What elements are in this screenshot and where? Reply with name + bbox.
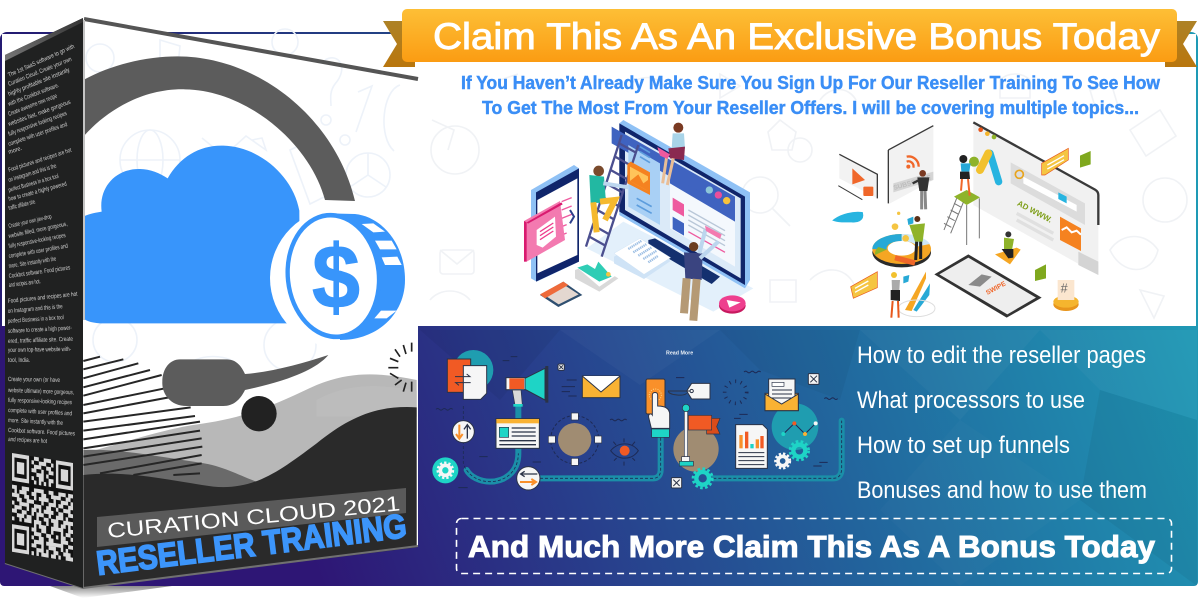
top rim of box (84, 19, 418, 79)
ring chart with man and coins (872, 212, 931, 267)
call to action box (456, 518, 1172, 574)
intro text: To Get The Most From Your Reseller Offers. I will be covering multiple topics... (482, 98, 1139, 118)
eye icon (611, 438, 638, 466)
side text (7, 43, 78, 445)
side text: fully responsive looking recipes (7, 110, 68, 138)
document swap icon (447, 359, 487, 399)
side text: The 1st SaaS software to go with (7, 43, 76, 79)
target node diagram (548, 413, 602, 465)
price tag (668, 383, 710, 399)
dashed pipe centres (463, 406, 842, 482)
low-poly texture of the lower panel (420, 330, 1197, 586)
man at subscribe card (913, 170, 929, 209)
ladder platform with person (944, 155, 980, 245)
side text: your own top-have website with- (8, 346, 71, 354)
side face top bevel (5, 18, 83, 61)
person climbing the ladder (589, 166, 628, 232)
product name line two: RESELLER TRAINING (94, 507, 409, 583)
side text: website ultimate) more gorgeous, (7, 387, 74, 396)
call to action box: And Much More Claim This As A Bonus Today (468, 529, 1156, 564)
box bottom edge (5, 546, 418, 588)
wave layers (83, 343, 417, 588)
side text: Cookbot software. Food pictures (8, 264, 71, 280)
teal accent circles (453, 350, 818, 450)
headset band (83, 56, 355, 201)
calendar (540, 282, 582, 307)
woman with tablet (891, 272, 935, 318)
teal pipes (467, 405, 842, 482)
product name band (97, 488, 406, 547)
topics list: Bonuses and how to use them (857, 477, 1147, 504)
smartphone swipe (934, 254, 1042, 318)
product box (5, 18, 418, 598)
side text: Curation Cloud. Create your own (7, 56, 73, 88)
side text: and recipes are hot. (8, 278, 41, 289)
side text: Food pictures and recipes are hot (7, 291, 78, 305)
phone tap icon (646, 379, 670, 437)
paper stacks (575, 238, 671, 292)
intro text (461, 73, 1161, 118)
box front face (83, 19, 418, 588)
gear badge (432, 457, 458, 483)
floor shadow (587, 222, 753, 312)
side text: and recipes are hot (8, 436, 47, 445)
faint doodle pattern on the white panel (430, 74, 1187, 318)
side text: Create your own jaw-drop (8, 213, 53, 230)
side text: software to create a high power- (8, 325, 72, 335)
box side face (5, 18, 83, 588)
small x boxes (558, 364, 819, 488)
side text: highly profitable site instantly (7, 66, 72, 98)
side text: complete with user profiles and (8, 407, 73, 417)
title: Claim This As An Exclusive Bonus Today (433, 16, 1161, 57)
topics list: What processors to use (857, 387, 1085, 414)
side text: more. (7, 145, 23, 156)
side text: ered, traffic affiliate site. Create (8, 336, 73, 345)
headset microphone (162, 355, 328, 406)
subscribe window (888, 126, 933, 204)
side text: perfect Business in a box tool (8, 173, 60, 194)
envelope icon (562, 376, 620, 398)
QR code (12, 453, 73, 562)
hashtag podium: # (1061, 281, 1068, 295)
smartphone swipe: SWIPE (985, 280, 1008, 297)
product name line one: CURATION CLOUD 2021 (106, 492, 401, 543)
side text: with the Cookbot software. (7, 82, 60, 108)
coin with dollar sign: $ (312, 228, 360, 328)
read more label: Read More (666, 350, 693, 356)
side text: on Instagram and this is the (8, 162, 58, 184)
side text: perfect Business in a box tool (8, 314, 64, 325)
topics list (857, 342, 1147, 504)
topics list: How to set up funnels (857, 432, 1070, 459)
cloud (83, 146, 300, 323)
clock ticks (725, 381, 747, 403)
side text: how to create a highly powered (8, 181, 68, 203)
gears (693, 441, 809, 488)
large browser window: AD WWW. (1016, 199, 1054, 225)
message cards and rss icons (851, 148, 1091, 298)
report chart document (736, 425, 767, 468)
blue swoosh (835, 213, 862, 221)
large browser window (973, 122, 1098, 275)
ribbon main band (402, 9, 1177, 62)
side text: Cookbot software. Food pictures (8, 427, 75, 438)
video ad card (838, 154, 877, 200)
open envelope with letter (765, 379, 798, 411)
side and front corner highlight (83, 20, 85, 320)
radial ticks (388, 343, 412, 392)
kneeling person on mat (995, 231, 1021, 264)
browser window icon (496, 419, 539, 448)
wavy and short accent marks (436, 357, 838, 488)
person standing at screen (684, 226, 722, 321)
ribbon left tail (383, 21, 415, 67)
monitor stand (648, 238, 720, 284)
person seated on the monitor (657, 123, 685, 185)
pink document card (524, 201, 565, 262)
side text: on Instagram and this is the (8, 303, 63, 315)
side text: fully responsive-looking recipes (8, 232, 66, 250)
side text: Create your own (or have (8, 376, 60, 384)
illustration: website builders on monitor (524, 120, 753, 321)
side text: websites fast, make gorgeous (7, 99, 72, 128)
illustration: digital marketing scene (835, 122, 1098, 318)
hashtag podium (1053, 280, 1079, 311)
up-down arrows circle (452, 421, 474, 443)
side text: complete with user profiles and (7, 121, 69, 148)
side text: fully responsive-looking recipes (8, 397, 72, 406)
intro text: If You Haven’t Already Make Sure You Sign Up For Our Reseller Training To See How (461, 73, 1161, 93)
side text: Create awesome new recipe (7, 93, 59, 118)
ribbon right tail (1165, 21, 1197, 67)
megaphone (506, 366, 548, 407)
box ground shadow (50, 586, 172, 598)
topics list: How to edit the reseller pages (857, 342, 1146, 369)
side text: traffic affiliate site. (8, 198, 37, 212)
flag with brown circle (673, 404, 720, 472)
monitor (612, 120, 750, 288)
black circle (241, 396, 277, 431)
ad logo shapes (969, 153, 999, 182)
side text: tool, India. (8, 357, 30, 364)
subscribe window: SUBSCRIBE (893, 174, 933, 192)
side text: website filled, more gorgeous, (7, 221, 68, 240)
ladder (586, 135, 638, 257)
side text: more. Site instantly with the (8, 255, 57, 270)
hatch lines (83, 357, 202, 475)
line chart dots (781, 421, 818, 436)
side text: complete with user profiles and (8, 243, 69, 260)
coin with dollar sign (270, 208, 410, 348)
side text: Food pictures and recipes are hot (7, 147, 73, 174)
front face faint doodles (86, 29, 400, 475)
left-right arrows circle (517, 467, 540, 490)
illustration: marketing flow pipeline (432, 350, 842, 490)
phone (531, 165, 579, 282)
ribbon banner (383, 9, 1197, 67)
play button (719, 295, 746, 314)
orange image tile (627, 162, 650, 195)
side text: more. Site instantly with the (8, 417, 64, 427)
